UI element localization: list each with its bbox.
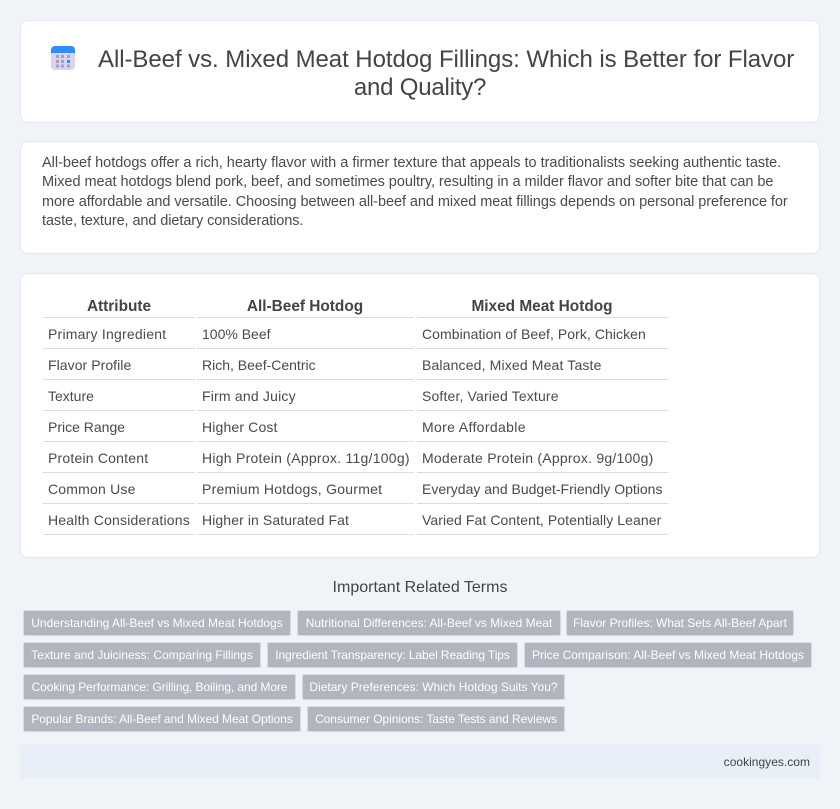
panel: comparison table: Higher Cost: [202, 419, 278, 435]
tag: Texture and Juiciness: Comparing Fillings: [31, 648, 253, 662]
panel: comparison table: Softer, Varied Texture: [422, 388, 559, 404]
title: [98, 46, 794, 101]
footer: [20, 745, 820, 779]
panel: comparison table: Combination of Beef, Pork, Chicken: [422, 326, 646, 342]
row: common use: Common Use: [48, 481, 136, 497]
row: flavor profile: Flavor Profile: [48, 357, 131, 373]
row: texture: Texture: [48, 388, 94, 404]
tag: Flavor Profiles: What Sets All-Beef Apart: [573, 616, 787, 630]
tag: [297, 610, 561, 636]
row: primary ingredient: Primary Ingredient: [48, 326, 166, 342]
tag: [23, 642, 261, 668]
intro text: [42, 155, 788, 229]
tag: [267, 642, 518, 668]
tag: [23, 706, 301, 732]
table header: Mixed Meat Hotdog: [471, 298, 613, 315]
related terms heading: Important Related Terms: [333, 579, 507, 596]
title: All-Beef vs. Mixed Meat Hotdog Fillings: Which is Better for Flavor: [98, 46, 794, 73]
tag: [23, 674, 296, 700]
panel: comparison table: Premium Hotdogs, Gourmet: [202, 481, 382, 497]
tag: [302, 674, 565, 700]
panel: comparison table: 100% Beef: [202, 326, 270, 342]
panel: comparison table: [20, 273, 820, 558]
panel: comparison table: Higher in Saturated Fat: [202, 512, 349, 528]
row: health considerations: Health Considerations: [48, 512, 190, 528]
tag: Consumer Opinions: Taste Tests and Reviews: [315, 712, 557, 726]
tag: [23, 610, 291, 636]
intro text: Mixed meat hotdogs blend pork, beef, and sometimes poultry, resulting in a milder flavor and softer bite that can be: [42, 174, 773, 190]
panel: comparison table: Moderate Protein (Approx. 9g/100g): [422, 450, 654, 466]
intro text: All-beef hotdogs offer a rich, hearty flavor with a firmer texture that appeals to traditionalists seeking authentic taste.: [42, 155, 781, 171]
tag: Cooking Performance: Grilling, Boiling, and More: [32, 680, 287, 694]
tag: Ingredient Transparency: Label Reading Tips: [275, 648, 510, 662]
tag: [566, 610, 794, 636]
intro text: more affordable and versatile. Choosing between all-beef and mixed meat fillings depends on personal preference for: [42, 194, 788, 210]
icon: calendar: [51, 46, 75, 70]
tag: [307, 706, 565, 732]
tag: Understanding All-Beef vs Mixed Meat Hotdogs: [31, 616, 283, 630]
tag list: [23, 610, 812, 732]
tag: Price Comparison: All-Beef vs Mixed Meat Hotdogs: [532, 648, 804, 662]
intro text: taste, texture, and dietary considerations.: [42, 213, 303, 229]
panel: comparison table: Everyday and Budget-Friendly Options: [422, 481, 662, 497]
tag: [524, 642, 812, 668]
panel: comparison table: Balanced, Mixed Meat Taste: [422, 357, 602, 373]
panel: comparison table: Firm and Juicy: [202, 388, 296, 404]
row: price range: Price Range: [48, 419, 125, 435]
tag: Popular Brands: All-Beef and Mixed Meat Options: [31, 712, 293, 726]
table header: All-Beef Hotdog: [247, 298, 363, 315]
source: cookingyes.com: [724, 755, 810, 769]
panel: comparison table: Varied Fat Content, Potentially Leaner: [422, 512, 661, 528]
panel: comparison table: More Affordable: [422, 419, 526, 435]
title: and Quality?: [354, 74, 486, 101]
row: protein content: Protein Content: [48, 450, 148, 466]
panel: comparison table: Rich, Beef-Centric: [202, 357, 316, 373]
tag: Dietary Preferences: Which Hotdog Suits You?: [309, 680, 558, 694]
table header: Attribute: [87, 298, 151, 315]
panel: comparison table: High Protein (Approx. 11g/100g): [202, 450, 410, 466]
table header: [87, 298, 613, 315]
intro panel: [20, 141, 820, 254]
tag: Nutritional Differences: All-Beef vs Mixed Meat: [306, 616, 552, 630]
header panel: [20, 20, 820, 123]
